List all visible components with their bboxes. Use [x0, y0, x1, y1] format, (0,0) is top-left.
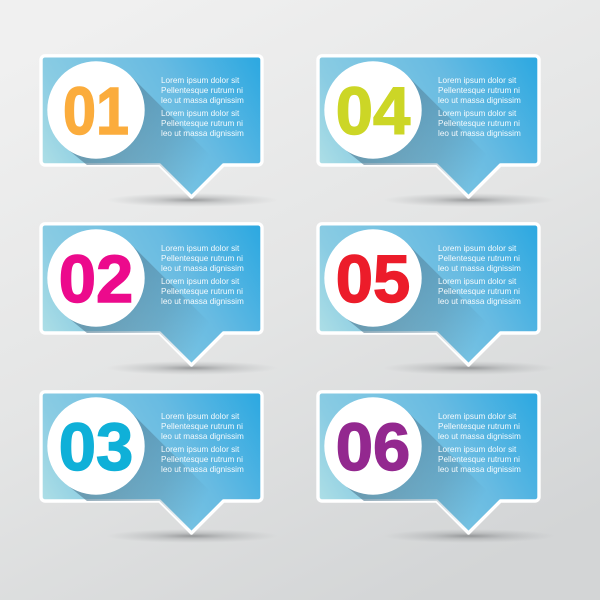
- number 05: 05: [336, 242, 410, 317]
- body text: leo ut massa dignissim: [438, 96, 521, 105]
- body text: Lorem ipsum dolor sit: [161, 244, 240, 253]
- number 01: 01: [63, 74, 129, 149]
- body text: Pellentesque rutrum ni: [438, 119, 520, 128]
- bubble drop shadow: [106, 529, 278, 543]
- number circle: [47, 229, 145, 327]
- body text: Pellentesque rutrum ni: [161, 455, 243, 464]
- long shadow: [70, 413, 200, 526]
- speech bubble: [41, 224, 262, 365]
- speech bubble: [318, 224, 539, 365]
- long shadow: [70, 77, 200, 190]
- panel: option 02: [41, 224, 278, 375]
- panel: option 06: [318, 392, 555, 543]
- body text: leo ut massa dignissim: [161, 297, 244, 306]
- number circle: [324, 229, 422, 327]
- panel: option 05: [318, 224, 555, 375]
- speech bubble: [41, 392, 262, 533]
- bubble drop shadow: [106, 193, 278, 207]
- long shadow: [347, 245, 476, 358]
- body text: Lorem ipsum dolor sit: [161, 76, 240, 85]
- bubble drop shadow: [106, 361, 278, 375]
- body text: leo ut massa dignissim: [438, 297, 521, 306]
- body text: Pellentesque rutrum ni: [161, 422, 243, 431]
- body text: leo ut massa dignissim: [438, 432, 521, 441]
- body text: Lorem ipsum dolor sit: [161, 412, 240, 421]
- body text: leo ut massa dignissim: [161, 129, 244, 138]
- number 06: 06: [336, 410, 410, 485]
- panel: option 03: [41, 392, 278, 543]
- body text: Pellentesque rutrum ni: [438, 254, 520, 263]
- speech bubble: [41, 56, 262, 197]
- body text: Pellentesque rutrum ni: [438, 422, 520, 431]
- body text: leo ut massa dignissim: [438, 465, 521, 474]
- body text: Pellentesque rutrum ni: [438, 455, 520, 464]
- body text: leo ut massa dignissim: [161, 432, 244, 441]
- body text: Pellentesque rutrum ni: [438, 86, 520, 95]
- long shadow: [70, 245, 200, 358]
- bubble drop shadow: [383, 361, 555, 375]
- body text: Pellentesque rutrum ni: [161, 86, 243, 95]
- body text: Pellentesque rutrum ni: [161, 119, 243, 128]
- body text: Lorem ipsum dolor sit: [438, 412, 517, 421]
- body text: Lorem ipsum dolor sit: [438, 277, 517, 286]
- number circle: [47, 61, 145, 159]
- number circle: [47, 397, 145, 495]
- body text: Lorem ipsum dolor sit: [438, 244, 517, 253]
- body text: Lorem ipsum dolor sit: [438, 76, 517, 85]
- body text: Lorem ipsum dolor sit: [438, 445, 517, 454]
- number circle: [324, 397, 422, 495]
- body text: Pellentesque rutrum ni: [161, 254, 243, 263]
- body text: Lorem ipsum dolor sit: [161, 109, 240, 118]
- long shadow: [347, 413, 476, 526]
- body text: Pellentesque rutrum ni: [161, 287, 243, 296]
- number 04: 04: [336, 74, 410, 149]
- body text: leo ut massa dignissim: [438, 264, 521, 273]
- body text: Lorem ipsum dolor sit: [161, 445, 240, 454]
- speech bubble: [318, 392, 539, 533]
- speech bubble: [318, 56, 539, 197]
- panel: option 04: [318, 56, 555, 207]
- bubble drop shadow: [383, 193, 555, 207]
- bubble drop shadow: [383, 529, 555, 543]
- number circle: [324, 61, 422, 159]
- long shadow: [347, 77, 476, 190]
- body text: leo ut massa dignissim: [161, 264, 244, 273]
- number 02: 02: [59, 242, 133, 317]
- body text: leo ut massa dignissim: [438, 129, 521, 138]
- body text: leo ut massa dignissim: [161, 465, 244, 474]
- body text: Pellentesque rutrum ni: [438, 287, 520, 296]
- body text: Lorem ipsum dolor sit: [161, 277, 240, 286]
- body text: leo ut massa dignissim: [161, 96, 244, 105]
- panel: option 01: [41, 56, 278, 207]
- body text: Lorem ipsum dolor sit: [438, 109, 517, 118]
- number 03: 03: [59, 410, 133, 485]
